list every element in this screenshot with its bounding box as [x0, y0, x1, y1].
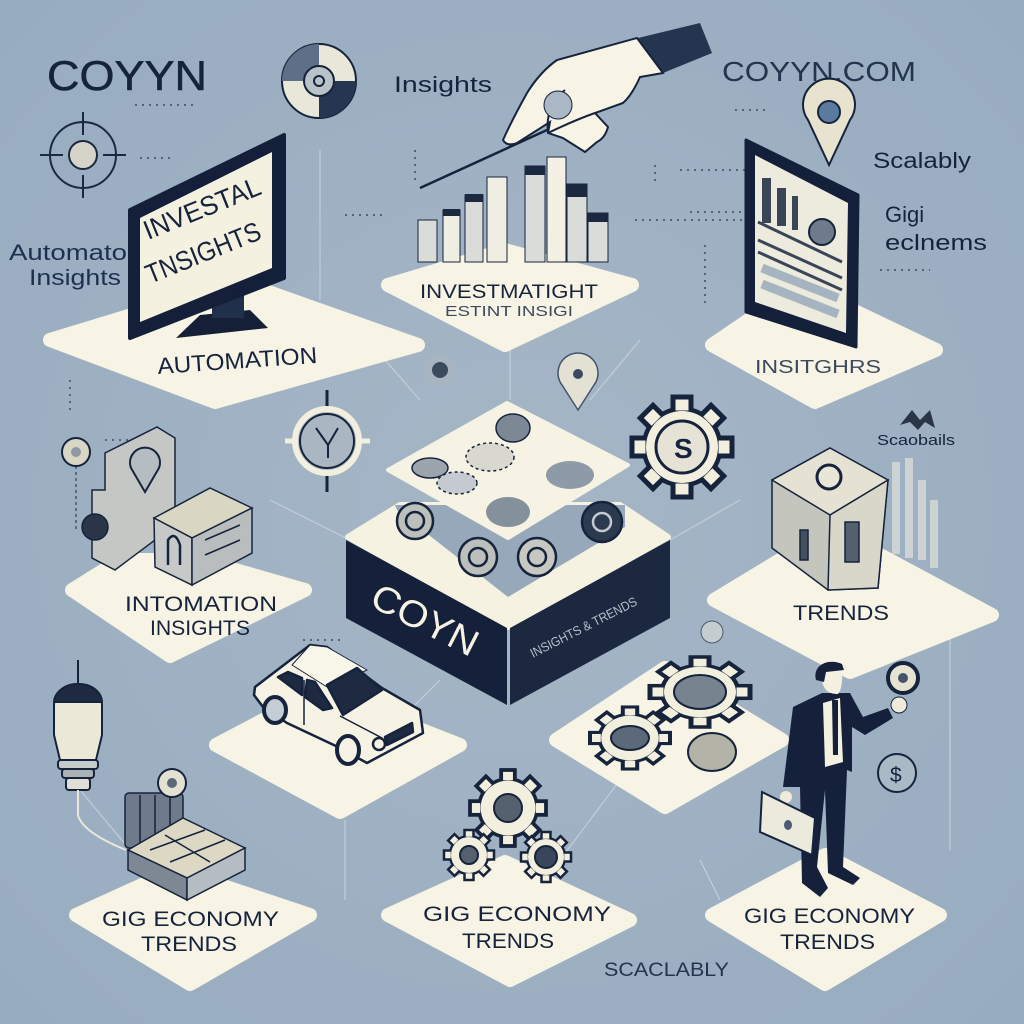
icon: light bulb: [54, 660, 126, 850]
label: Scalably bottom: SCACLABLY: [604, 960, 729, 981]
icon: dollar coin: $: [890, 764, 902, 787]
icon: small pin center-left: [424, 354, 456, 386]
icon: map device: [125, 793, 245, 900]
heading: Insightghrs: INSITGHRS: [755, 357, 881, 377]
panel: gig economy centre: [388, 770, 630, 980]
heading: Automation: AUTOMATION: [157, 342, 318, 379]
chart: bars: [418, 157, 608, 262]
icon: target: [40, 112, 126, 198]
heading: Trends: TRENDS: [780, 931, 875, 954]
icon: monitor: INVESTAL: [139, 171, 265, 246]
heading: Insights: INSIGHTS: [150, 617, 250, 640]
title: COYYN: COYYN: [47, 52, 207, 99]
icon: businessman: [760, 662, 918, 897]
panel: gig economy left: [76, 769, 310, 984]
label: COYN: COYN: [364, 576, 485, 664]
heading: Intomation: INTOMATION: [125, 593, 277, 616]
label: Insights top: Insights: [394, 72, 492, 97]
icon: tablet: [746, 140, 858, 347]
arrow: pointer line: [420, 130, 547, 188]
label: COYYN.COM: COYYN.COM: [722, 56, 916, 87]
coins: [397, 502, 622, 576]
label: Gigi right: Gigi: [885, 202, 924, 227]
icon: location pin: [803, 79, 855, 165]
icon: small coin: [158, 769, 186, 797]
icon: monitor: [130, 135, 284, 338]
icon: three gears: [444, 770, 571, 882]
label: Insights left: Insights: [29, 265, 121, 290]
heading: Trends: TRENDS: [793, 602, 889, 625]
label: box side text: INSIGHTS & TRENDS: [528, 594, 640, 661]
panel: car platform: [216, 645, 460, 812]
icon: gears and coin: [590, 657, 750, 771]
panel: automation platform: [50, 135, 418, 402]
icon: gear dollar: [632, 397, 732, 497]
subheading: ESTINT INSIGI: [445, 303, 573, 320]
heading: Gig Economy: GIG ECONOMY: [744, 905, 915, 928]
panel: gig economy right: [712, 855, 940, 984]
icons on sheet: [412, 414, 594, 527]
label: Scalably top: Scalably: [873, 148, 971, 173]
chart: faint bars: [892, 458, 938, 568]
icon: device and box: [82, 427, 252, 585]
label: eclnems right: eclnems: [885, 230, 987, 255]
label: Scalably right: Scaobails: [877, 432, 955, 449]
panel: tablet platform: [712, 140, 936, 402]
heading: Trends: TRENDS: [462, 930, 554, 953]
icon: monitor: TNSIGHTS: [141, 216, 265, 290]
top sheet: [388, 403, 628, 538]
icon: cube: [772, 448, 888, 590]
heading: Gig Economy: GIG ECONOMY: [423, 903, 611, 926]
central box: COYN: [346, 403, 670, 705]
icon: dollar coin: [878, 754, 916, 792]
icon: crosshair dial: [285, 390, 370, 492]
panel: gears platform: [556, 621, 782, 807]
icon: gear dollar: S: [674, 433, 693, 464]
icon: hand pointing: [503, 23, 712, 152]
heading: Trends: TRENDS: [141, 933, 237, 956]
panel: information insights: [62, 427, 305, 656]
panel: investment platform: [388, 130, 632, 345]
icon: small circle: [62, 438, 90, 530]
label: Automato left: Automato: [9, 240, 127, 265]
panel: trends: [714, 448, 992, 672]
icon: small emblem: [900, 410, 935, 430]
heading: Gig Economy: GIG ECONOMY: [102, 908, 279, 931]
icon: half dial: [282, 44, 356, 118]
heading: Investmatight: INVESTMATIGHT: [420, 282, 598, 303]
icon: small pin center-right: [558, 353, 598, 410]
icon: car: [254, 645, 423, 764]
